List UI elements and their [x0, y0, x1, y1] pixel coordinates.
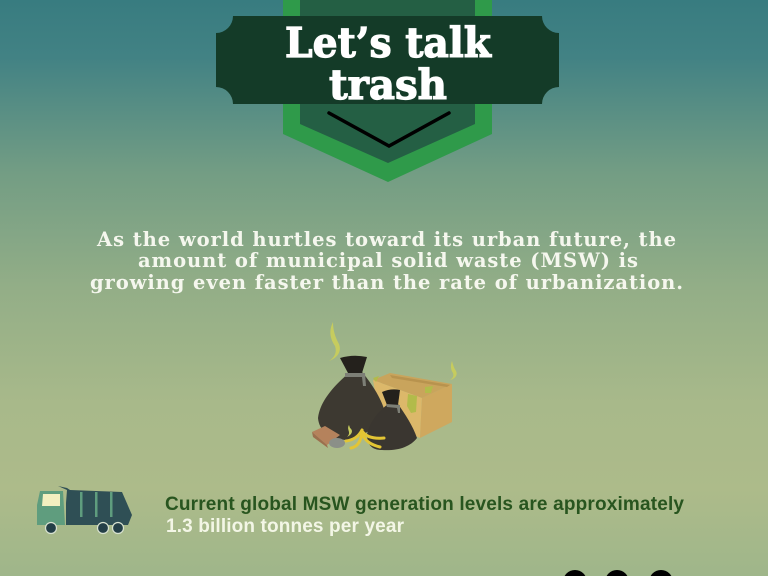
icon: stink wisps: [329, 322, 457, 380]
icon: small trash bag: [367, 389, 417, 450]
intro text: amount of municipal solid waste (MSW) is: [138, 249, 638, 272]
title: trash: [329, 61, 447, 109]
badge inner chevron: [300, 0, 475, 163]
intro text: [90, 228, 683, 294]
icon: cardboard box: [373, 373, 452, 438]
truck wheels: [46, 522, 124, 534]
badge outer chevron: [283, 0, 492, 182]
chevron arrow: [329, 113, 449, 146]
icon: small wisp: [347, 425, 352, 437]
truck stripes: [80, 492, 112, 517]
truck window: [42, 494, 60, 506]
statistic text: Current global MSW generation levels are approximately: [165, 494, 684, 515]
icon: banana peel: [346, 430, 384, 448]
icon: trash bags and box: [312, 322, 457, 450]
icon: large trash bag: [318, 356, 385, 440]
title: [285, 19, 493, 109]
title: Let’s talk: [285, 19, 493, 67]
truck body: [58, 486, 132, 525]
icon: brick: [312, 426, 340, 448]
icon: stone: [329, 438, 345, 448]
intro text: As the world hurtles toward its urban future, the: [96, 228, 676, 251]
bottom dots: [563, 570, 673, 576]
title badge: [216, 0, 559, 182]
statistic text: 1.3 billion tonnes per year: [166, 516, 405, 537]
truck cab: [37, 491, 65, 525]
icon: garbage truck: [37, 486, 132, 534]
intro text: growing even faster than the rate of urbanization.: [90, 271, 683, 294]
statistic text: [165, 494, 684, 537]
title banner: [216, 16, 559, 104]
